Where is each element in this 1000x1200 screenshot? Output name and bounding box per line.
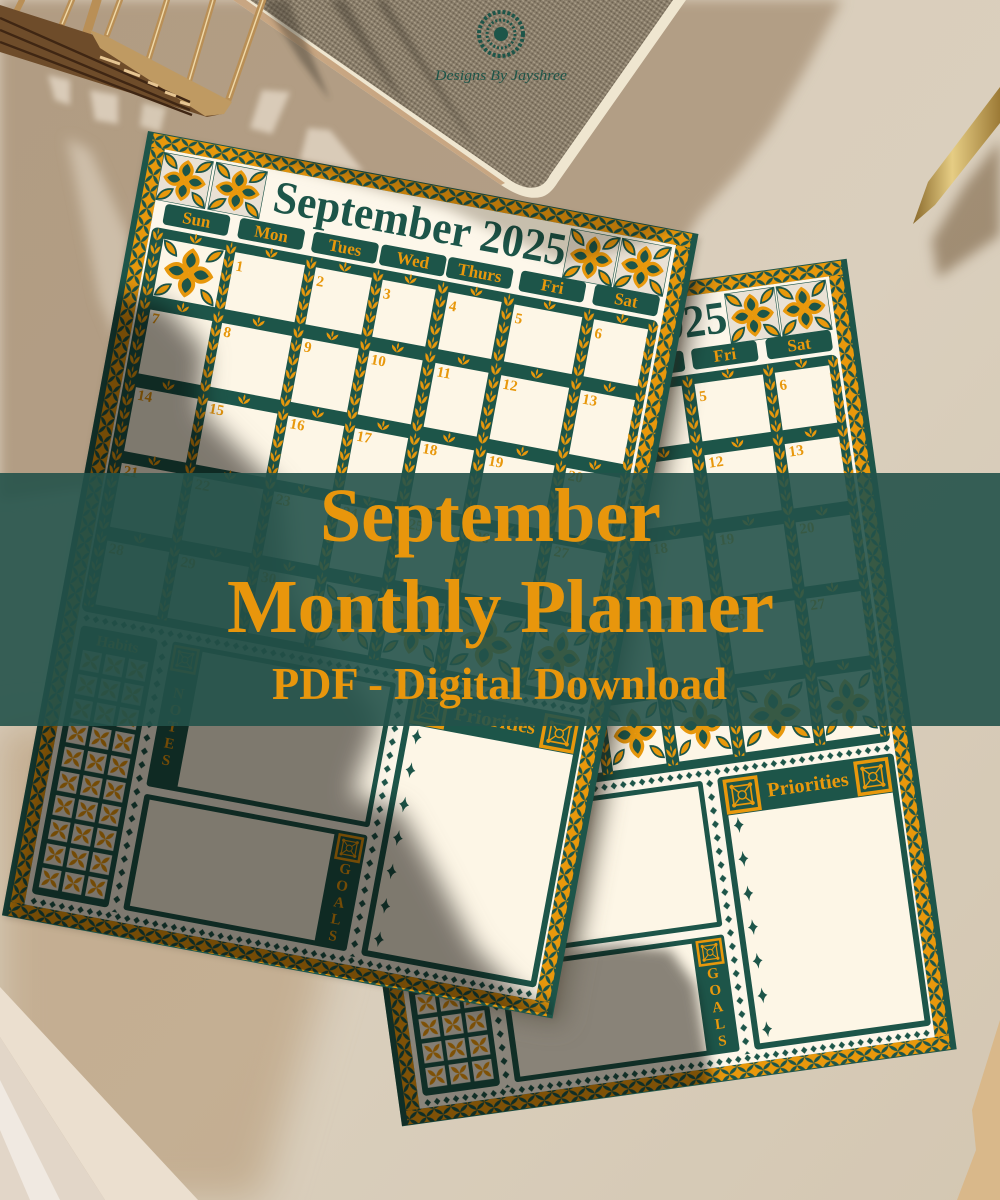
front page panel: goals: G xyxy=(338,861,353,879)
back page day numbers: 28 xyxy=(386,735,403,753)
back page panel: notes xyxy=(477,781,723,958)
back page day numbers: 29 xyxy=(458,725,476,743)
front page day numbers: 23 xyxy=(274,492,292,510)
front page day numbers: 18 xyxy=(421,441,439,460)
back page day numbers: 13 xyxy=(788,443,805,461)
front page day numbers: 14 xyxy=(136,388,154,406)
front page day numbers: 15 xyxy=(208,401,225,420)
front page weekday headers: Fri xyxy=(540,275,566,298)
white leather item, bottom left xyxy=(0,987,198,1200)
back page day numbers: 24 xyxy=(596,626,614,644)
front page frame and border xyxy=(2,131,698,1018)
front page panel: notes: T xyxy=(166,719,179,736)
back page panel: habits xyxy=(385,815,500,1096)
back page panel: goals xyxy=(499,934,740,1082)
logo: mandala and signature xyxy=(434,12,567,84)
front page weekday headers: Thurs xyxy=(456,260,504,286)
gold wire basket xyxy=(0,0,263,117)
front page day numbers: 16 xyxy=(288,416,306,435)
front planner page xyxy=(2,131,698,1018)
back page day numbers: 22 xyxy=(448,646,465,664)
gold pen and its shadow xyxy=(913,87,1000,278)
back page panel: notes: T xyxy=(498,886,510,903)
front page day numbers: 21 xyxy=(122,463,140,482)
soft drop shadow under front page xyxy=(4,133,701,1019)
front page day numbers: 10 xyxy=(369,352,387,371)
front page day numbers: 6 xyxy=(593,326,604,343)
back planner page xyxy=(292,259,957,1126)
back page weekday headers: Sun xyxy=(351,393,382,416)
back page panel: notes: E xyxy=(500,902,512,920)
back page title: September 2025 xyxy=(429,291,730,383)
back page weekday headers: Thurs xyxy=(628,353,675,378)
front page panel: habits xyxy=(31,625,158,908)
back page day numbers: 20 xyxy=(799,520,816,538)
front page day numbers: 3 xyxy=(382,286,392,303)
front page panel: habits: Habits xyxy=(95,633,140,657)
back page panel: goals: G xyxy=(706,965,720,983)
front page day numbers: 2 xyxy=(315,274,325,291)
back page frame and border xyxy=(292,259,957,1126)
back page weekday headers: Mon xyxy=(423,383,460,406)
back page panel: notes: S xyxy=(503,919,514,936)
front page panel: notes: N xyxy=(172,685,185,703)
back page day numbers: 4 xyxy=(632,398,642,415)
back page day numbers: 16 xyxy=(518,559,536,577)
back page weekday headers xyxy=(332,330,833,420)
front page day numbers: 30 xyxy=(260,570,277,588)
front page day numbers: 24 xyxy=(341,504,359,523)
front page panel: goals: O xyxy=(335,878,349,895)
front page panel: notes: E xyxy=(163,736,176,753)
back page day numbers: 10 xyxy=(575,472,592,490)
front page day numbers: 7 xyxy=(150,311,161,328)
front page weekday headers xyxy=(162,204,660,317)
front page day numbers: 25 xyxy=(407,517,425,535)
back page day numbers: 30 xyxy=(540,713,557,731)
front page day numbers: 12 xyxy=(501,377,519,395)
shadows falling on front page xyxy=(2,152,676,1015)
front page panel: goals: L xyxy=(329,911,342,929)
back page day numbers: 5 xyxy=(698,388,708,405)
front page calendar grid xyxy=(81,225,661,706)
banner heading line 2: Monthly Planner xyxy=(227,565,774,649)
banner heading line 1: September xyxy=(320,474,661,558)
back page weekday headers: Sat xyxy=(786,334,812,356)
back page day numbers: 9 xyxy=(507,483,517,500)
back page panel: habits: Habits xyxy=(404,822,448,844)
back page day numbers: 21 xyxy=(375,657,392,674)
front page day numbers: 27 xyxy=(552,544,571,563)
front page day numbers: 28 xyxy=(107,541,125,560)
back page panel: goals: A xyxy=(711,999,724,1016)
front page weekday headers: Wed xyxy=(395,248,431,273)
title banner xyxy=(0,473,1000,726)
back page day numbers: 25 xyxy=(663,617,680,634)
back page day numbers: 27 xyxy=(809,596,827,614)
front page panel: priorities xyxy=(361,685,586,988)
back page dotted dividers xyxy=(383,743,932,1107)
notebook with fabric cover xyxy=(233,0,686,198)
logo: mandala and signature: Designs By Jayshree xyxy=(434,68,567,84)
back page panel: notes: N xyxy=(493,852,506,869)
front page day numbers xyxy=(107,245,611,640)
back page day numbers: 14 xyxy=(365,580,382,598)
front page day numbers: 26 xyxy=(473,529,491,548)
front page day numbers: 17 xyxy=(355,429,373,447)
back page panel: priorities: Priorities xyxy=(766,769,850,802)
front page panel: priorities: Priorities xyxy=(453,702,537,739)
front page weekday headers: Sat xyxy=(613,289,640,312)
front page day numbers: 1 xyxy=(234,259,245,276)
back page panel: priorities xyxy=(717,753,931,1050)
front page panel: goals xyxy=(123,794,368,951)
back page panel: notes: O xyxy=(495,869,509,886)
back page weekday headers: Wed xyxy=(566,363,602,386)
front page day numbers: 9 xyxy=(303,340,313,357)
back page day numbers: 12 xyxy=(708,454,725,472)
front page weekday headers: Sun xyxy=(181,208,213,232)
front page weekday headers: Tues xyxy=(327,235,363,260)
front page panel: notes: O xyxy=(168,702,183,720)
front page weekday headers: Mon xyxy=(253,221,290,246)
back page day numbers: 6 xyxy=(779,377,789,394)
back page day numbers: 2 xyxy=(498,416,508,433)
back page day numbers: 15 xyxy=(437,570,454,588)
front page day numbers: 29 xyxy=(179,554,197,573)
back page corner tiles xyxy=(314,280,832,401)
back page day numbers xyxy=(345,376,838,753)
back page day numbers: 3 xyxy=(566,407,575,424)
front page day numbers: 8 xyxy=(222,324,232,342)
front page day numbers: 20 xyxy=(566,468,584,487)
front page day numbers: 19 xyxy=(487,453,505,472)
back page day numbers: 7 xyxy=(354,504,364,521)
front page panel: goals: A xyxy=(332,894,346,912)
front page day numbers: 11 xyxy=(435,364,452,383)
back page panel: goals: O xyxy=(708,982,722,1000)
front page dotted dividers xyxy=(28,613,587,999)
back page day numbers: 19 xyxy=(718,531,735,549)
back page day numbers: 8 xyxy=(426,494,436,511)
back page day numbers: 18 xyxy=(652,540,669,558)
back page day numbers: 17 xyxy=(586,549,603,567)
back page day numbers: 23 xyxy=(529,635,546,653)
back page day numbers: 11 xyxy=(641,463,657,481)
shadows falling on back page xyxy=(382,276,720,1126)
front page day numbers: 22 xyxy=(194,477,211,495)
front page panel: goals: S xyxy=(327,928,338,945)
front page day numbers: 5 xyxy=(513,311,524,328)
back page weekday headers: Tues xyxy=(498,372,534,396)
back page day numbers: 26 xyxy=(729,607,746,625)
banner subtitle: PDF - Digital Download xyxy=(272,659,727,709)
back page day numbers: 1 xyxy=(417,428,427,445)
front page panel: notes xyxy=(146,641,396,828)
back page panel: goals: L xyxy=(714,1016,726,1033)
front page title: September 2025 xyxy=(270,171,571,276)
back page calendar grid xyxy=(326,353,893,812)
front page panel: notes: S xyxy=(160,752,172,770)
front page day numbers: 13 xyxy=(581,392,598,410)
back page weekday headers: Fri xyxy=(712,344,738,366)
wooden object, bottom right xyxy=(957,1020,1000,1200)
front page corner tiles xyxy=(155,152,672,296)
front page day numbers: 4 xyxy=(448,298,458,316)
back page panel: goals: S xyxy=(717,1033,728,1050)
